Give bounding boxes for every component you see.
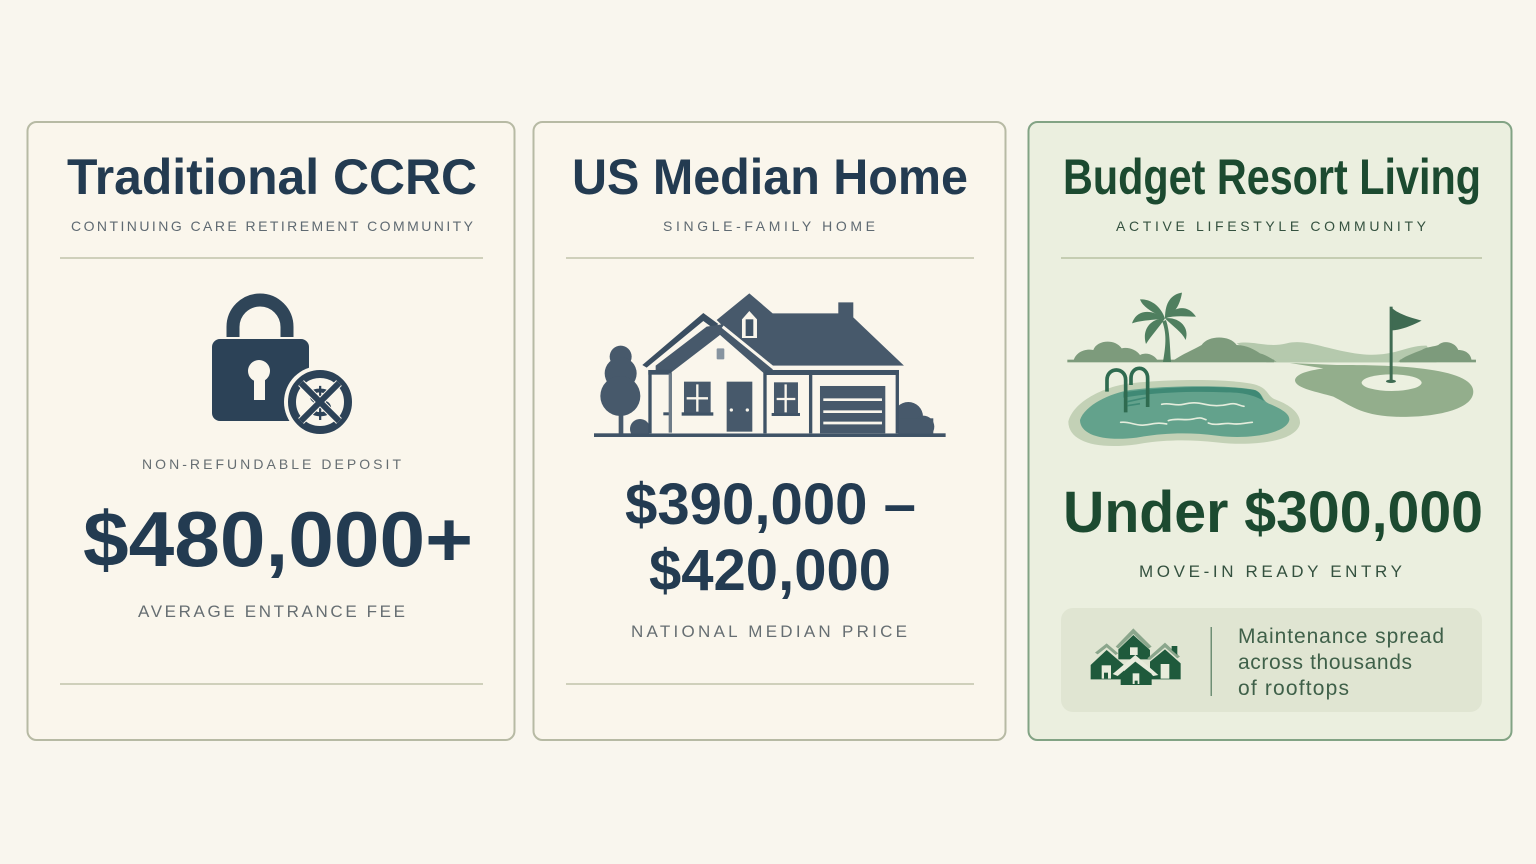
heading: Traditional CCRC: Traditional CCRC — [67, 149, 477, 205]
panel: US Median Home — [534, 122, 1006, 740]
subheading: single-family home: SINGLE-FAMILY HOME — [663, 218, 875, 234]
text: maintenance spread across thousands of rooftops: of rooftops — [1238, 677, 1349, 700]
text: maintenance spread across thousands of rooftops: across thousands — [1238, 651, 1412, 674]
caption: national median price: NATIONAL MEDIAN PRICE — [631, 622, 907, 641]
panel: Budget Resort Living — [1028, 122, 1512, 740]
icon: resort scene with palm, pool and golf flag — [1067, 293, 1476, 446]
panel: Traditional CCRC — [28, 122, 514, 740]
icon: padlock with crossed-out dollar: $ — [308, 379, 332, 426]
text: maintenance spread across thousands of rooftops: Maintenance spread — [1238, 625, 1444, 648]
icon: padlock with crossed-out dollar — [212, 300, 356, 438]
text: maintenance spread across thousands of rooftops — [1238, 625, 1444, 700]
price: $480,000+: $480,000+ — [83, 495, 473, 583]
caption: average entrance fee: AVERAGE ENTRANCE FEE — [138, 602, 405, 621]
label: non-refundable deposit: NON-REFUNDABLE DEPOSIT — [142, 456, 401, 472]
infographic canvas — [26, 121, 1512, 741]
subheading: continuing care: CONTINUING CARE RETIREMENT COMMUNITY — [71, 218, 474, 234]
price: $390,000 to $420,000: $390,000 – — [625, 472, 916, 537]
heading: US Median Home: US Median Home — [572, 149, 968, 205]
caption: move-in ready entry: MOVE-IN READY ENTRY — [1139, 562, 1402, 581]
price: under $300,000: Under $300,000 — [1063, 480, 1483, 545]
price: $390,000 to $420,000: $420,000 — [649, 538, 891, 603]
icon: house with tree and garage — [594, 293, 946, 445]
icon: cluster of houses — [1091, 628, 1181, 685]
subheading: active lifestyle community: ACTIVE LIFESTYLE COMMUNITY — [1116, 218, 1427, 234]
price: $390,000 to $420,000 — [625, 472, 916, 603]
callout: maintenance spread — [1061, 608, 1482, 712]
